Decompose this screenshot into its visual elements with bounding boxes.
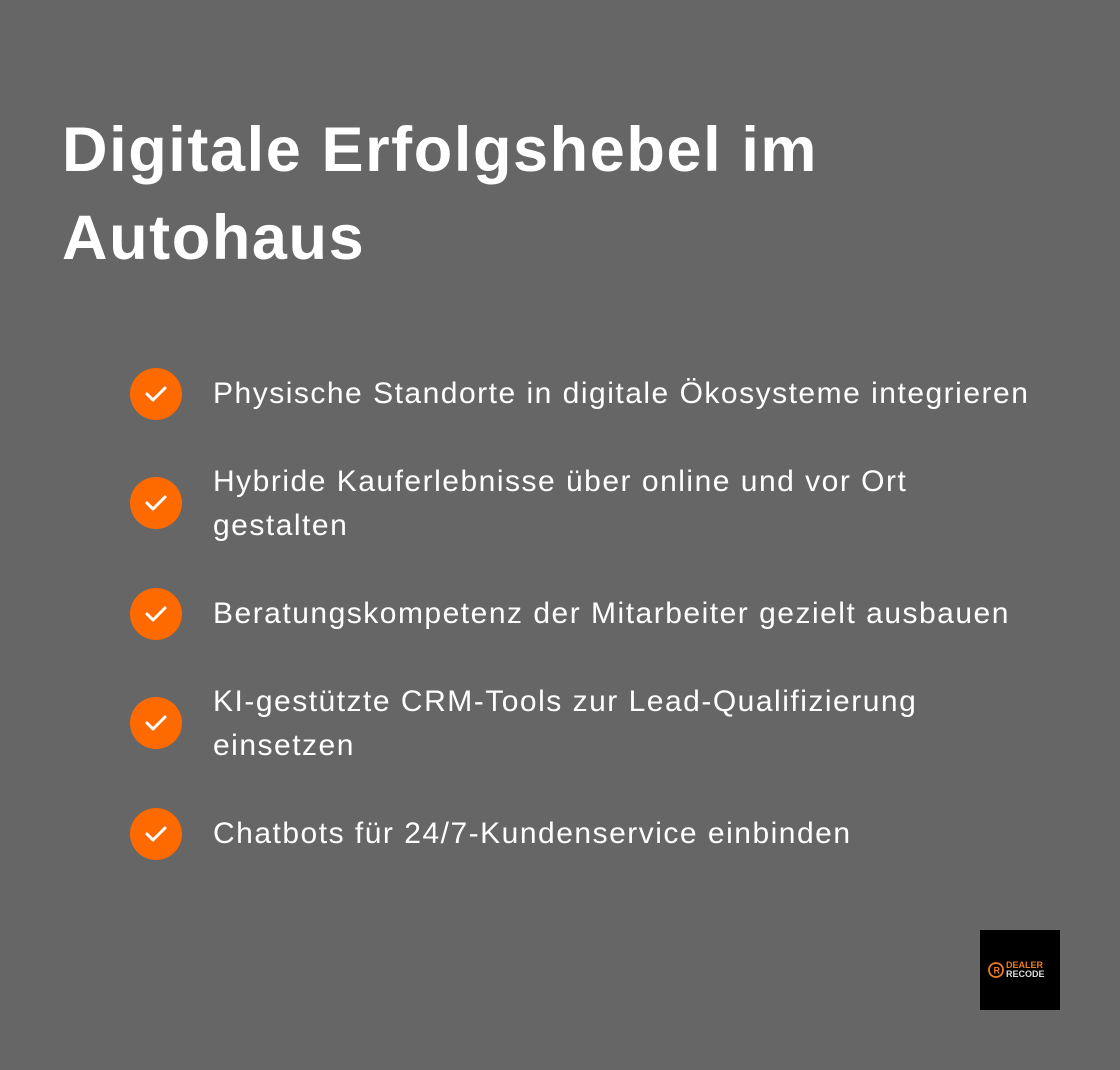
item 1: Physische Standorte in digitale Ökosysteme integrieren [213,377,1029,410]
logo [980,930,1060,1010]
item 5 [130,808,852,860]
title [62,115,818,273]
logo: DEALER [1006,960,1044,970]
item 2: Hybride Kauferlebnisse über online und vor Ort gestalten [213,465,907,542]
item 3: Beratungskompetenz der Mitarbeiter gezielt ausbauen [213,597,1010,630]
logo: RECODE [1006,969,1045,979]
item 1 [130,368,1029,420]
logo: R [994,966,1000,976]
item 5: Chatbots für 24/7-Kundenservice einbinden [213,817,852,850]
item 3 [130,588,1010,640]
item 4: KI-gestützte CRM-Tools zur Lead-Qualifizierung einsetzen [213,685,917,762]
title: Digitale Erfolgshebel im [62,115,818,185]
title: Autohaus [62,203,365,273]
